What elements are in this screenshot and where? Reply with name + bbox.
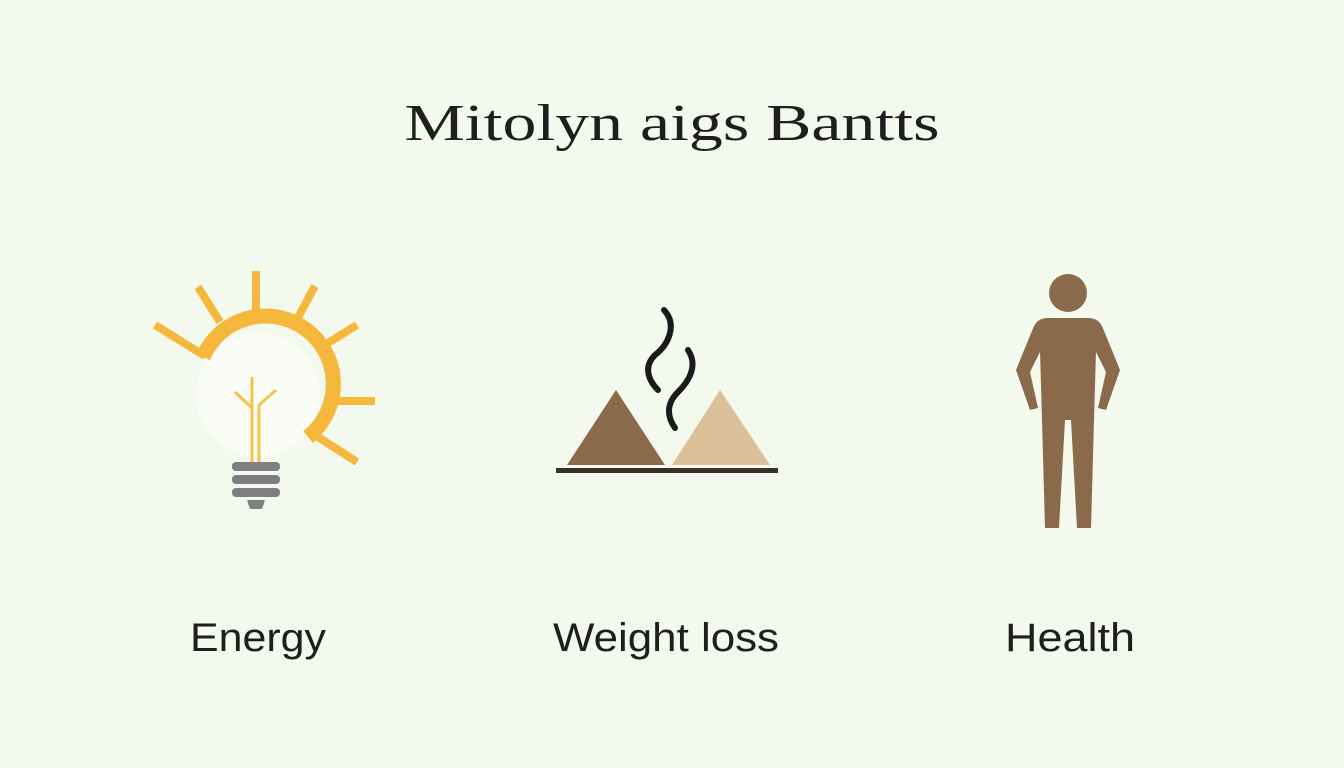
icon: weight loss mountains (556, 310, 778, 473)
label: Weight loss: Weight loss (553, 616, 779, 660)
icon: light bulb (155, 271, 375, 509)
label: Health: Health (1005, 616, 1135, 660)
title: Mitolyn aigs Bantts (404, 95, 940, 152)
icon: person (1016, 274, 1120, 528)
label: Energy: Energy (190, 616, 326, 660)
